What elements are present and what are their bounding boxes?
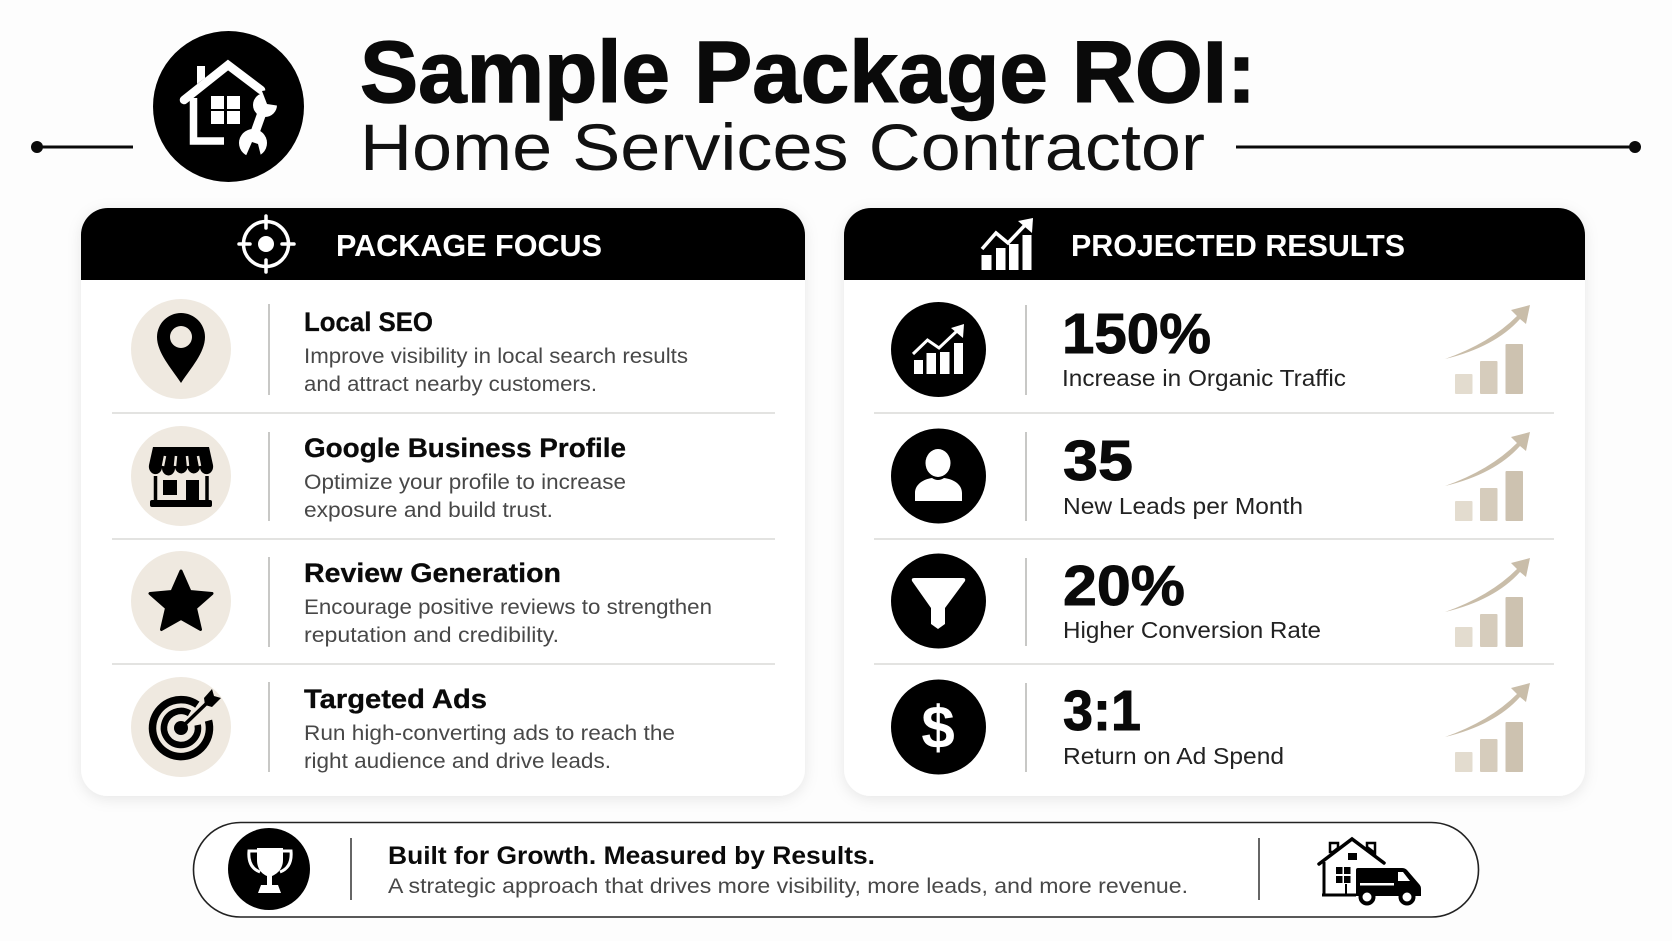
footer text (388, 842, 1188, 898)
text: targeted ads: right audience and drive leads. (304, 750, 611, 773)
icon: dollar badge (891, 680, 986, 774)
stat: 20%: 20% (1063, 554, 1185, 618)
row: conversion rate (891, 554, 1530, 648)
icon: star (131, 551, 231, 651)
icon: dollar badge: $ (921, 694, 955, 761)
icon: mini growth chart (1445, 683, 1530, 772)
stat: 150% (1062, 302, 1346, 391)
text: google business profile (304, 433, 626, 522)
text: review generation (304, 558, 712, 647)
stat: 3:1: Return on Ad Spend (1063, 743, 1284, 769)
heading: package focus: PACKAGE FOCUS (336, 228, 602, 263)
stat: 35: New Leads per Month (1063, 493, 1303, 519)
text: local seo: Local SEO (304, 307, 433, 337)
stat: 150%: Increase in Organic Traffic (1062, 365, 1346, 391)
stat: 3:1 (1063, 679, 1284, 769)
stat: 35 (1063, 429, 1303, 519)
icon: target with arrow (131, 677, 231, 777)
title (360, 24, 1256, 184)
icon: map pin (131, 299, 231, 399)
text: local seo: Improve visibility in local search results (304, 345, 688, 368)
stat: 35: 35 (1063, 429, 1133, 493)
text: targeted ads: Targeted Ads (304, 684, 487, 714)
text: review generation: reputation and credibility. (304, 624, 559, 647)
panel: package focus (81, 208, 805, 796)
icon: person badge (891, 428, 986, 524)
stat: 150%: 150% (1062, 302, 1211, 366)
text: targeted ads (304, 684, 675, 773)
text: google business profile: Google Business Profile (304, 433, 626, 463)
icon: mini growth chart (1445, 305, 1530, 394)
icon: mini growth chart (1445, 558, 1530, 647)
stat: 20% (1063, 554, 1321, 643)
text: targeted ads: Run high-converting ads to reach the (304, 722, 675, 745)
header rule left (31, 141, 133, 153)
panel header: package focus (81, 208, 805, 280)
stat: 3:1: 3:1 (1063, 679, 1141, 743)
footer text: A strategic approach that drives more visibility, more leads, and more revenue. (388, 874, 1188, 898)
text: google business profile: exposure and build trust. (304, 499, 553, 522)
text: review generation: Encourage positive reviews to strengthen (304, 596, 712, 619)
panel header: projected results (844, 208, 1585, 280)
icon: house and wrench badge (153, 31, 304, 182)
text: google business profile: Optimize your profile to increase (304, 471, 626, 494)
icon: house and van (1319, 839, 1421, 904)
icon: trophy badge (228, 828, 310, 910)
row: organic traffic (891, 302, 1530, 397)
row: local seo (131, 299, 688, 399)
text: local seo: and attract nearby customers. (304, 373, 597, 396)
header rule right (1236, 141, 1641, 153)
icon: mini growth chart (1445, 432, 1530, 521)
text: review generation: Review Generation (304, 558, 561, 588)
footer text: Built for Growth. Measured by Results. (388, 842, 875, 870)
icon: crosshair (239, 216, 294, 272)
title: Sample Package ROI: (360, 24, 1256, 121)
panel: projected results (844, 208, 1585, 796)
row: review generation (131, 551, 712, 651)
icon: funnel badge (891, 554, 986, 648)
footer banner (194, 822, 1478, 917)
text: local seo (304, 307, 688, 396)
row: google business profile (131, 426, 626, 526)
row: return on ad spend (891, 679, 1530, 774)
title: Home Services Contractor (360, 110, 1205, 184)
heading: projected results: PROJECTED RESULTS (1071, 228, 1405, 263)
stat: 20%: Higher Conversion Rate (1063, 617, 1321, 643)
icon: storefront (131, 426, 231, 526)
row: new leads (891, 428, 1530, 524)
icon: chart badge (891, 302, 986, 397)
row: targeted ads (131, 677, 675, 777)
icon: growth chart (982, 218, 1033, 270)
